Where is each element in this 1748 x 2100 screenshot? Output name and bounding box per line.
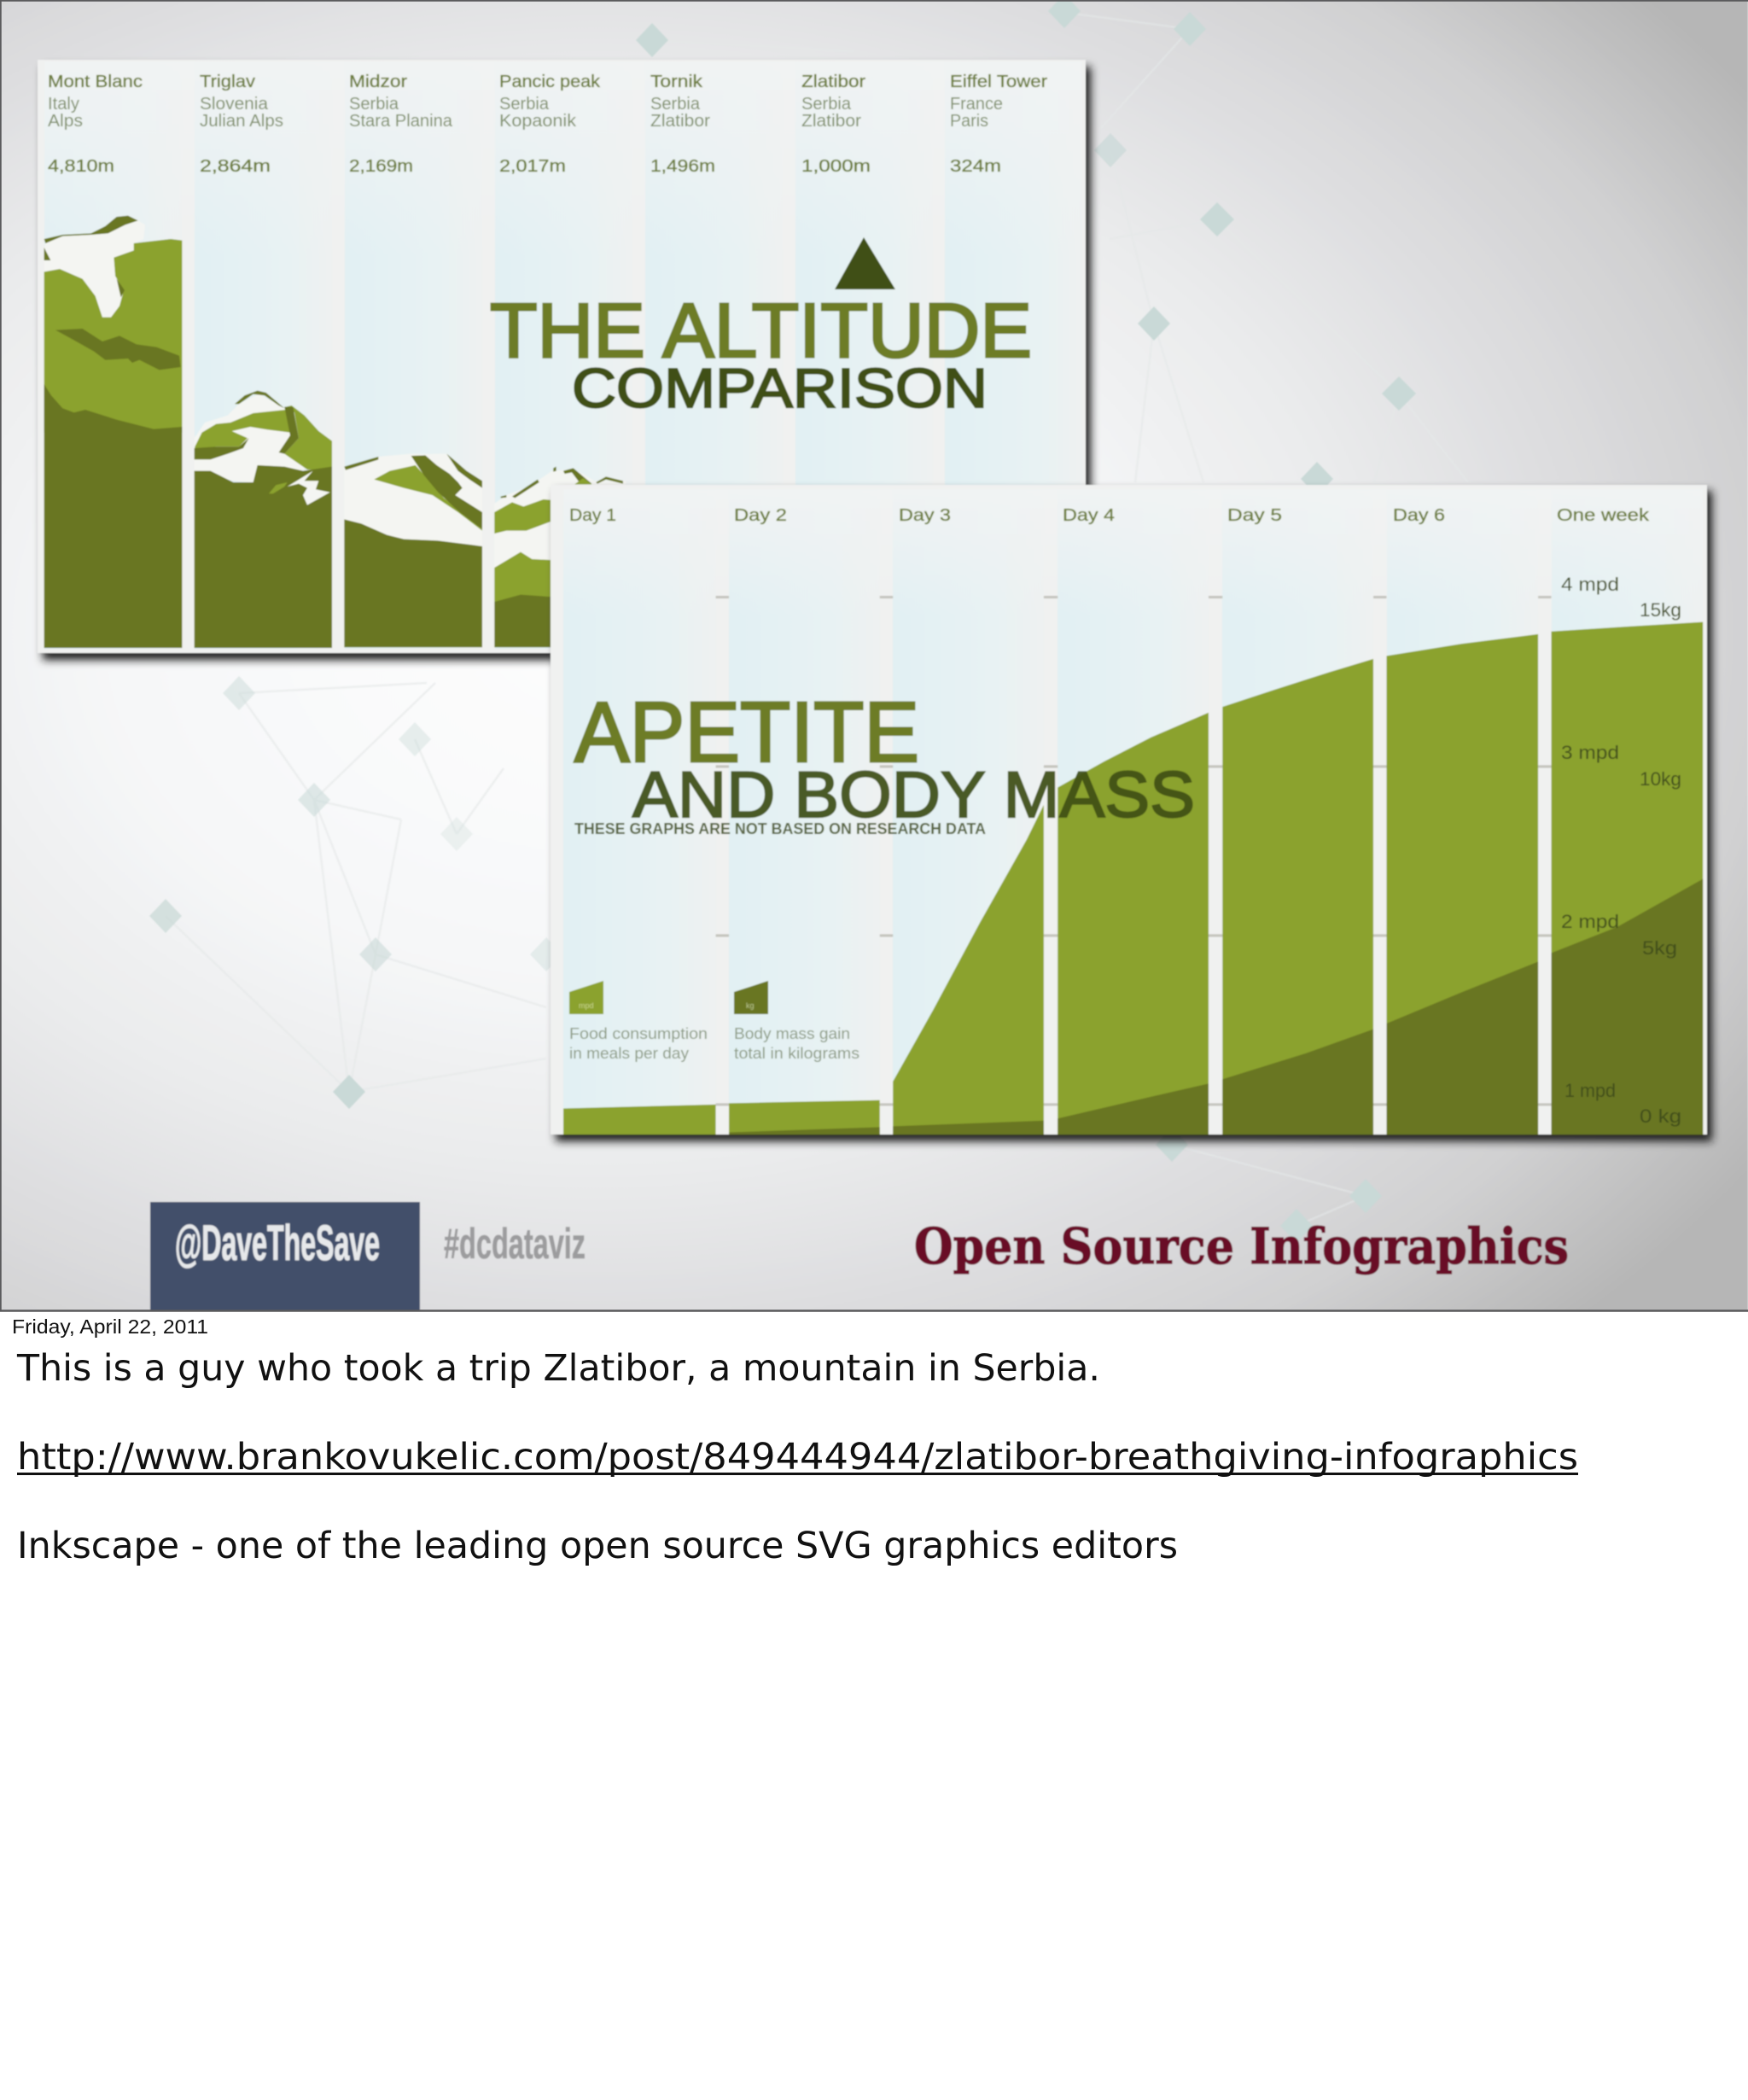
day labels: Day 3 bbox=[899, 506, 951, 525]
legend: food consumption bbox=[569, 981, 708, 1062]
heading: and body mass: AND BODY MASS bbox=[632, 759, 1195, 831]
subtitle disclaimer: THESE GRAPHS ARE NOT BASED ON RESEARCH DATA bbox=[574, 820, 986, 837]
panel base bbox=[551, 485, 1707, 1135]
day labels: Day 2 bbox=[734, 506, 787, 525]
panel: the altitude comparison bbox=[38, 60, 1091, 660]
icon: triangle peak bbox=[835, 237, 895, 289]
peak labels: Pancic peak bbox=[499, 73, 601, 91]
food legend text: in meals per day bbox=[569, 1045, 689, 1062]
panel shadow bbox=[43, 67, 1091, 660]
food legend text: Food consumption bbox=[569, 1025, 708, 1042]
day labels: Day 6 bbox=[1393, 506, 1445, 525]
note line 1: This is a guy who took a trip Zlatibor, a mountain in Serbia. bbox=[16, 1347, 1100, 1390]
peak labels: Alps bbox=[48, 112, 83, 131]
kg unit: kg bbox=[746, 1001, 755, 1010]
peak labels: 2,017m bbox=[499, 157, 566, 176]
peak labels: 324m bbox=[950, 157, 1001, 176]
slide frame edges bbox=[0, 0, 1748, 1311]
icon: kg swatch bbox=[734, 981, 768, 1014]
note link bbox=[17, 1436, 1578, 1479]
date: Friday, April 22, 2011 bbox=[12, 1315, 208, 1338]
peak labels: Italy bbox=[48, 95, 79, 114]
peak labels: France bbox=[950, 95, 1003, 114]
gutter tick marks bbox=[716, 596, 1552, 1105]
network lines background bbox=[166, 13, 1468, 1226]
day columns bbox=[563, 489, 1703, 1131]
peak labels bbox=[48, 73, 1047, 176]
peak labels: Mont Blanc bbox=[48, 73, 143, 91]
peak labels: 1,496m bbox=[650, 157, 715, 176]
peak labels: 2,864m bbox=[200, 157, 271, 176]
day labels: One week bbox=[1557, 506, 1650, 525]
scale labels: 15kg bbox=[1640, 599, 1681, 621]
mountain: Triglav bbox=[195, 391, 332, 648]
peak labels: Serbia bbox=[499, 95, 550, 114]
heading: the altitude: THE ALTITUDE bbox=[490, 289, 1032, 374]
peak labels: Serbia bbox=[801, 95, 852, 114]
network diamonds background bbox=[149, 0, 1416, 1243]
scale labels: 3 mpd bbox=[1561, 742, 1619, 763]
day labels: Day 1 bbox=[569, 506, 616, 525]
peak labels: Eiffel Tower bbox=[950, 73, 1047, 91]
peak labels: 2,169m bbox=[349, 157, 413, 176]
peak labels: Zlatibor bbox=[801, 73, 865, 91]
peak labels: Stara Planina bbox=[349, 112, 453, 131]
handle background bbox=[150, 1202, 420, 1311]
peak labels: Midzor bbox=[349, 73, 407, 91]
scale labels: 1 mpd bbox=[1564, 1080, 1616, 1101]
panel shadow bbox=[556, 491, 1712, 1141]
scale labels bbox=[1561, 574, 1681, 1127]
heading: comparison: COMPARISON bbox=[572, 357, 988, 419]
link text: http://www.brankovukelic.com/post/849444944/zlatibor-breathgiving-infographics bbox=[17, 1436, 1578, 1479]
note line 3: Inkscape - one of the leading open source SVG graphics editors bbox=[17, 1525, 1178, 1567]
mountain: Mont Blanc bbox=[44, 216, 182, 648]
day labels: Day 5 bbox=[1227, 506, 1282, 525]
peak labels: Julian Alps bbox=[200, 112, 283, 131]
area: body mass bbox=[729, 879, 1703, 1135]
panel base bbox=[38, 60, 1086, 653]
scale labels: 5kg bbox=[1642, 937, 1677, 959]
day labels bbox=[569, 506, 1650, 525]
slide title: Open Source Infographics bbox=[914, 1217, 1569, 1275]
peak labels: Zlatibor bbox=[650, 112, 710, 131]
peak labels: Triglav bbox=[200, 73, 255, 91]
hashtag: #dcdataviz bbox=[444, 1220, 586, 1268]
scale labels: 10kg bbox=[1640, 768, 1681, 790]
peak labels: Tornik bbox=[650, 73, 703, 91]
slide background bbox=[0, 0, 1748, 1311]
peak labels: Serbia bbox=[349, 95, 399, 114]
area: food consumption bbox=[563, 622, 1703, 1135]
scale labels: 4 mpd bbox=[1561, 574, 1619, 595]
peak labels: 1,000m bbox=[801, 157, 871, 176]
day labels: Day 4 bbox=[1063, 506, 1115, 525]
mpd unit: mpd bbox=[579, 1001, 594, 1010]
peak labels: 4,810m bbox=[48, 157, 114, 176]
speaker notes bbox=[16, 1347, 1578, 1567]
body mass legend text: total in kilograms bbox=[734, 1045, 859, 1062]
area chart: food consumption and body mass bbox=[563, 622, 1703, 1135]
mountain: Midzor bbox=[344, 454, 482, 647]
twitter handle box bbox=[150, 1202, 420, 1311]
peak labels: Kopaonik bbox=[499, 112, 577, 131]
heading: apetite: APETITE bbox=[574, 685, 919, 780]
mountain: Pancic peak bbox=[494, 467, 626, 647]
legend: body mass bbox=[734, 981, 859, 1062]
peak labels: Paris bbox=[950, 112, 988, 131]
peak labels: Serbia bbox=[650, 95, 701, 114]
slide area bbox=[0, 0, 1748, 1311]
scale labels: 2 mpd bbox=[1561, 911, 1619, 932]
handle text: @DaveTheSave bbox=[175, 1216, 380, 1271]
link underline bbox=[17, 1473, 1578, 1475]
panel: appetite and body mass bbox=[551, 485, 1712, 1141]
icon: mpd swatch bbox=[569, 981, 603, 1014]
altitude columns bbox=[44, 61, 1082, 649]
peak labels: Zlatibor bbox=[801, 112, 861, 131]
body mass legend text: Body mass gain bbox=[734, 1025, 850, 1042]
scale labels: 0 kg bbox=[1640, 1105, 1681, 1127]
peak labels: Slovenia bbox=[200, 95, 269, 114]
